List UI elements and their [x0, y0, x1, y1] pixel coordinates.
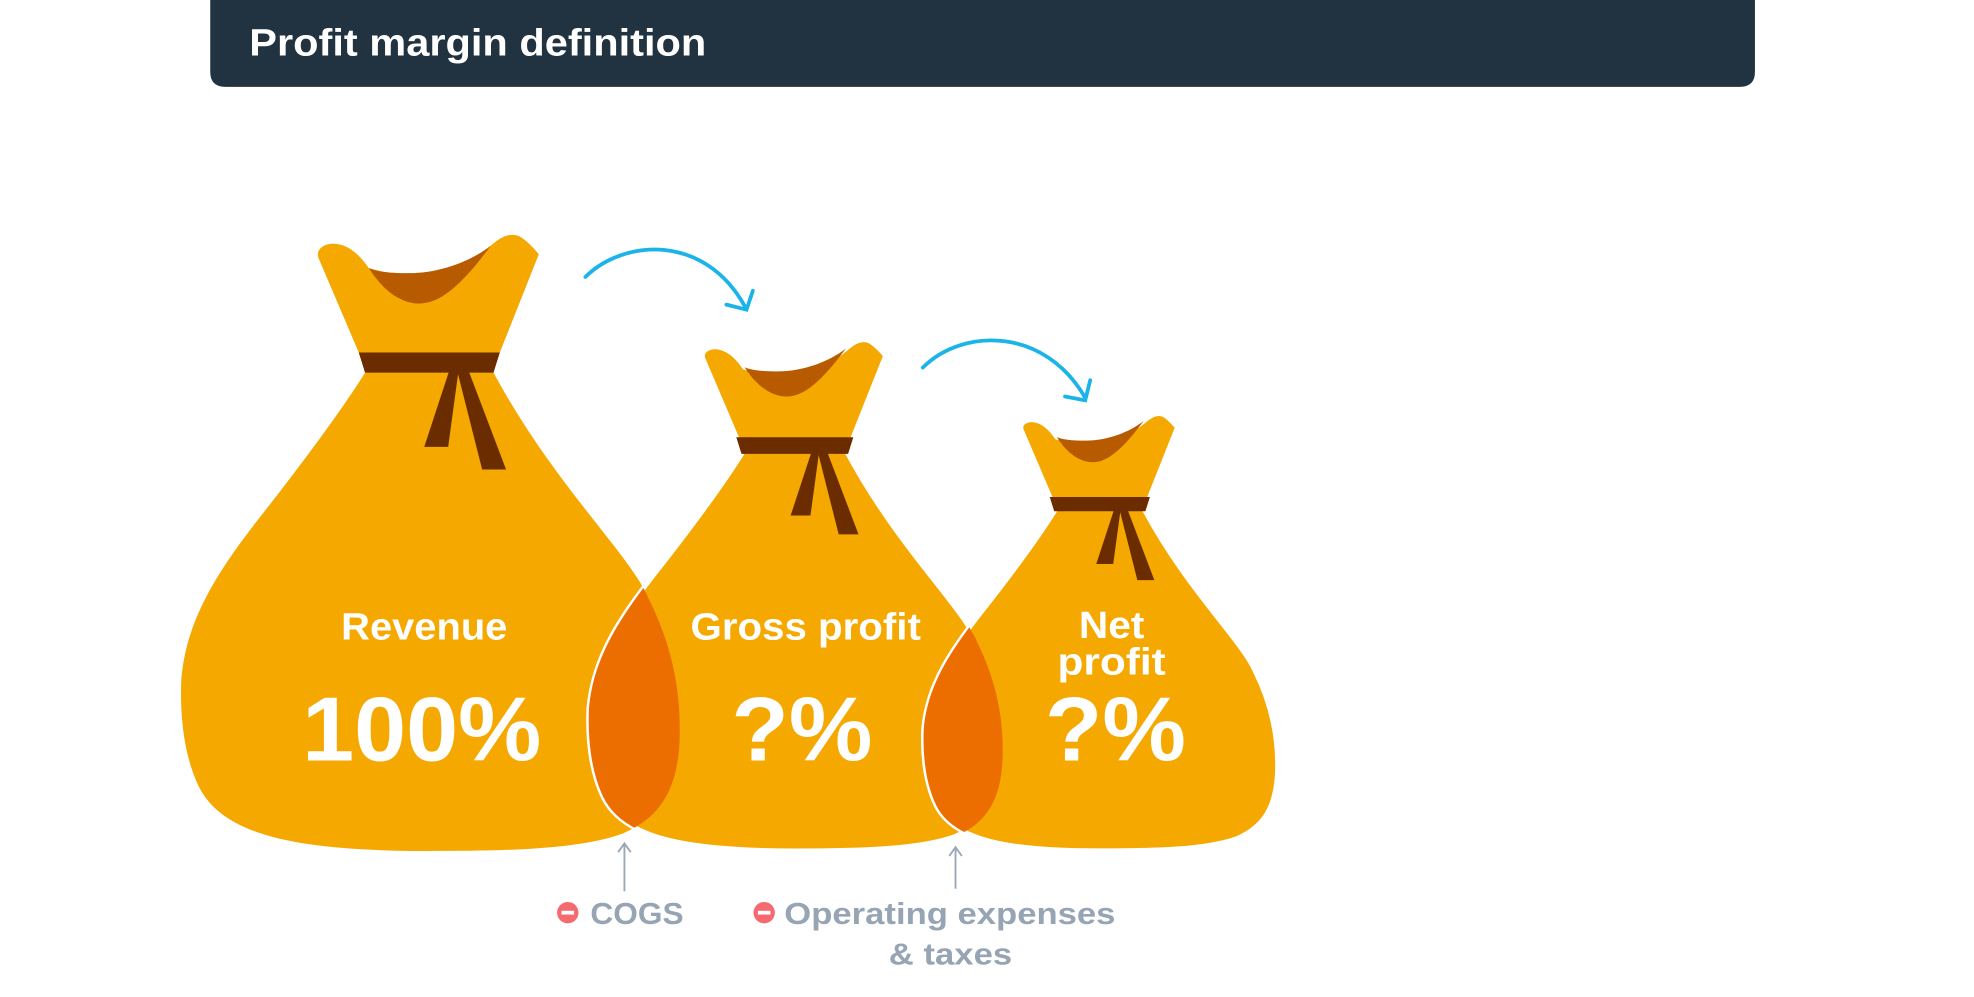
pointer: opex: [949, 847, 962, 889]
value: ?%: ?%: [731, 679, 872, 780]
label: gross profit: Gross profit: [691, 606, 921, 648]
legend: operating expenses & taxes: & taxes: [889, 938, 1012, 971]
bag: gross profit: [589, 340, 1003, 851]
legend: operating expenses & taxes: [753, 898, 1115, 971]
arrow: revenue to gross: [585, 250, 753, 310]
bag: net profit: profit: [1058, 642, 1166, 684]
legend: COGS: COGS: [590, 898, 684, 931]
value: ?%: ?%: [1045, 679, 1186, 780]
value: 100%: 100%: [302, 679, 541, 780]
title: Profit margin definition: [249, 22, 706, 64]
bag: revenue: [181, 235, 680, 851]
pointer: COGS: [618, 843, 631, 891]
bag: net profit: [924, 413, 1278, 851]
label: net profit: Net: [1079, 605, 1145, 647]
title bar: [210, 0, 1755, 87]
overlap: operating expenses: [924, 627, 1003, 832]
overlap: COGS: [588, 588, 680, 828]
arrow: gross to net: [923, 340, 1090, 400]
legend: operating expenses & taxes: Operating expenses: [784, 898, 1115, 931]
label: revenue: Revenue: [341, 606, 507, 648]
